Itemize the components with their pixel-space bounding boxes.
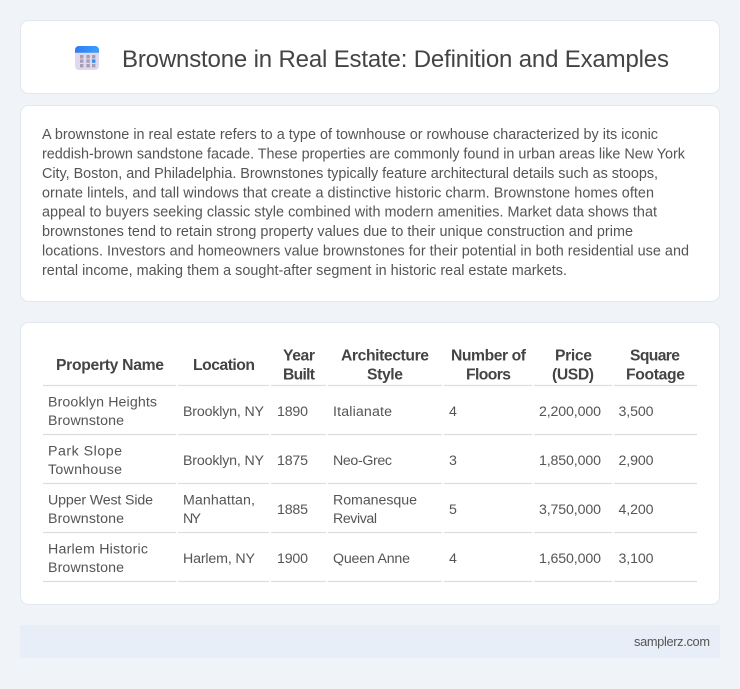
table row: Brooklyn Heights Brownstone: Italianate <box>333 404 392 420</box>
table header row: Location <box>193 357 255 374</box>
table row: Harlem Historic Brownstone: Queen Anne <box>333 551 410 567</box>
text block: description paragraph <box>42 127 689 279</box>
footer text: samplerz.com <box>634 634 710 649</box>
table header row: Built <box>283 366 316 383</box>
table row: Park Slope Townhouse: Brooklyn, NY <box>183 453 265 469</box>
table row: Harlem Historic Brownstone <box>48 542 654 576</box>
table row: Upper West Side Brownstone: 3,750,000 <box>539 502 601 518</box>
table header row: Floors <box>466 366 511 383</box>
table row: Park Slope Townhouse: 1875 <box>277 453 308 469</box>
table header row: Price <box>555 348 592 365</box>
table row: Upper West Side Brownstone: 1885 <box>277 502 308 518</box>
table row: Park Slope Townhouse: Townhouse <box>48 462 122 478</box>
table row: Upper West Side Brownstone: 4,200 <box>618 502 654 518</box>
table row: Upper West Side Brownstone: 5 <box>449 502 457 518</box>
text block: description paragraph: reddish-brown sandstone facade. These properties are commonly found in urban areas like New York <box>42 146 686 162</box>
table row: Harlem Historic Brownstone: 4 <box>449 551 457 567</box>
table header row: Footage <box>626 366 685 383</box>
table row: Brooklyn Heights Brownstone: 2,200,000 <box>539 404 601 420</box>
table row: Brooklyn Heights Brownstone: Brooklyn, NY <box>183 404 265 420</box>
table header row: Year <box>283 348 315 365</box>
table row: Park Slope Townhouse: Neo-Grec <box>333 453 392 469</box>
table row: Brooklyn Heights Brownstone: 3,500 <box>618 404 654 420</box>
table row: Upper West Side Brownstone: Brownstone <box>48 511 124 527</box>
table header row: Square <box>630 348 680 365</box>
panel: description <box>20 106 720 302</box>
text block: description paragraph: A brownstone in real estate refers to a type of townhouse or rowhouse characterized by its iconic <box>42 127 658 143</box>
table row: Park Slope Townhouse: 2,900 <box>618 453 654 469</box>
text block: description paragraph: appeal to buyers seeking classic style combined with modern amenities. Market data shows that <box>42 205 657 221</box>
table row: Upper West Side Brownstone: Manhattan, <box>183 493 255 509</box>
table row: Upper West Side Brownstone <box>48 493 654 527</box>
table row: Brooklyn Heights Brownstone <box>48 395 654 429</box>
table header row: Architecture <box>341 348 429 365</box>
table row: Brooklyn Heights Brownstone: Brownstone <box>48 413 124 429</box>
text block: description paragraph: City, Boston, and Philadelphia. Brownstones typically feature architectural details such as stoops, <box>42 166 658 182</box>
table row: Upper West Side Brownstone: Upper West Side <box>48 493 153 509</box>
table row: Harlem Historic Brownstone: Brownstone <box>48 560 124 576</box>
table row: Harlem Historic Brownstone: 1900 <box>277 551 308 567</box>
table row: Harlem Historic Brownstone: Harlem Historic <box>48 542 148 558</box>
table row: Harlem Historic Brownstone: Harlem, NY <box>183 551 256 567</box>
table header row: Number of <box>451 348 527 365</box>
text block: description paragraph: rental income, making them a sought-after segment in historic real estate markets. <box>42 263 567 279</box>
table row: Upper West Side Brownstone: NY <box>183 511 202 527</box>
text block: description paragraph: brownstones tend to retain strong property values due to their unique construction and prime <box>42 224 633 240</box>
table row: Park Slope Townhouse <box>48 444 654 478</box>
table row: Brooklyn Heights Brownstone: 4 <box>449 404 457 420</box>
icon: calendar <box>75 46 99 70</box>
table row: Brooklyn Heights Brownstone: 1890 <box>277 404 308 420</box>
table header row <box>56 348 685 383</box>
table row: Brooklyn Heights Brownstone: Brooklyn Heights <box>48 395 157 411</box>
table header row: Property Name <box>56 357 164 374</box>
table row: Harlem Historic Brownstone: 1,650,000 <box>539 551 601 567</box>
table row: Upper West Side Brownstone: Romanesque <box>333 493 417 509</box>
table row: Harlem Historic Brownstone: 3,100 <box>618 551 654 567</box>
table row: Park Slope Townhouse: 3 <box>449 453 457 469</box>
table row: Upper West Side Brownstone: Revival <box>333 511 377 527</box>
text block: description paragraph: locations. Investors and homeowners value brownstones for their potential in both residential use and <box>42 244 689 260</box>
title: Brownstone in Real Estate: Definition and Examples <box>122 46 669 73</box>
panel: property table <box>20 322 720 604</box>
table header row: (USD) <box>552 366 594 383</box>
text block: description paragraph: ornate lintels, and tall windows that create a distinctive historic charm. Brownstone homes often <box>42 185 654 201</box>
table header row: Style <box>367 366 403 383</box>
table row: Park Slope Townhouse: Park Slope <box>48 444 122 460</box>
panel: title header <box>20 20 720 94</box>
footer <box>20 625 720 658</box>
table row: Park Slope Townhouse: 1,850,000 <box>539 453 601 469</box>
